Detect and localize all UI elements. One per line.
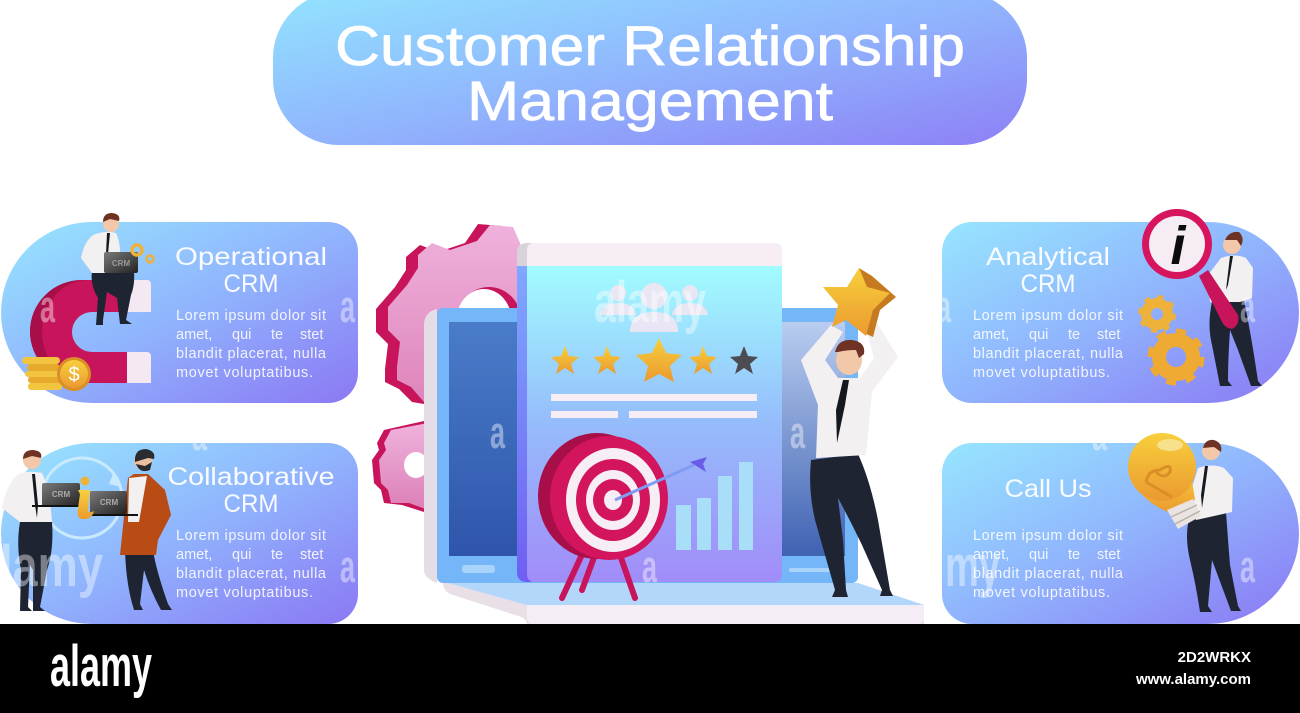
text placeholder lines [551,394,757,418]
analytical CRM text: CRM [1020,270,1076,298]
icon: customer silhouettes [600,283,708,332]
icon: small pink gear [372,421,428,512]
icon: target with arrow [538,433,707,598]
operational CRM text: movet voluptatibus. [176,365,313,381]
collaborative CRM text: te [271,547,283,563]
operational CRM text [175,243,327,381]
panel: operational CRM background [1,222,358,403]
panel: analytical CRM background [942,222,1299,403]
analytical CRM text: qui [1029,327,1048,343]
title text: Management [467,69,833,132]
title text: Customer Relationship [335,14,965,77]
call us text: Lorem ipsum dolor sit [973,528,1123,544]
operational CRM text: blandit placerat, nulla [176,346,327,362]
watermark letters: a [40,281,55,332]
panel: collaborative CRM background [1,443,358,624]
watermark letters: a [642,541,657,592]
collaborative CRM text [168,463,334,601]
call us text: blandit placerat, nulla [973,566,1124,582]
collaborative CRM text: Collaborative [168,463,334,491]
analytical CRM text: amet, [973,327,1009,343]
watermark letters: a [1240,541,1255,592]
call us text: stet [1097,547,1120,563]
collaborative CRM text: Lorem ipsum dolor sit [176,528,326,544]
call us text: qui [1029,547,1048,563]
operational CRM text: qui [232,327,251,343]
collaborative CRM text: CRM [224,490,278,518]
footer bar [0,624,1300,713]
illustration: review document [517,243,782,582]
watermark letters: a [936,281,951,332]
icon: magnifier, gears and man: i [1170,216,1186,276]
icon: light bulb and man [1128,433,1241,612]
panel: call us background [942,443,1299,624]
icon: magnet with coins and seated man: CRM [112,259,130,268]
collaborative CRM text: qui [232,547,251,563]
rating stars [551,338,758,382]
analytical CRM text: stet [1097,327,1120,343]
analytical CRM text: Lorem ipsum dolor sit [973,308,1123,324]
operational CRM text: CRM [224,270,278,298]
call us text: movet voluptatibus. [973,585,1110,601]
operational CRM text: amet, [176,327,212,343]
watermark letters: a [340,541,355,592]
watermark letters [0,270,1255,599]
watermark letters: a [1092,409,1107,460]
watermark letters: my [945,534,1000,599]
watermark letters: alamy [594,270,706,335]
alamy logo: alamy [50,634,152,699]
watermark letters: lamy [0,534,103,599]
analytical CRM text: movet voluptatibus. [973,365,1110,381]
analytical CRM text [973,243,1124,381]
collaborative CRM text: blandit placerat, nulla [176,566,327,582]
collaborative CRM text: amet, [176,547,212,563]
collaborative CRM text: stet [300,547,323,563]
watermark letters: a [490,407,505,458]
operational CRM text: Operational [175,243,327,271]
analytical CRM text: te [1068,327,1080,343]
icon: two men exchanging information: CRM [52,490,70,499]
call us text: te [1068,547,1080,563]
image ID: 2D2WRKX [1178,649,1251,666]
call us text: amet, [973,547,1009,563]
icon: large pink gear [376,224,521,420]
illustration: laptop [424,308,924,624]
figure: man holding gold star [801,268,898,597]
icon: magnet with coins and seated man [22,213,154,391]
collaborative CRM text: movet voluptatibus. [176,585,313,601]
bar chart [676,462,753,550]
watermark letters: a [340,281,355,332]
analytical CRM text: Analytical [986,243,1110,271]
analytical CRM text: blandit placerat, nulla [973,346,1124,362]
website: www.alamy.com [1135,671,1251,688]
icon: two men exchanging information [2,449,172,611]
icon: magnifier, gears and man [1140,209,1262,386]
icon: two men exchanging information: CRM [100,498,118,507]
icon: magnet with coins and seated man: $ [68,364,80,386]
operational CRM text: stet [300,327,323,343]
operational CRM text: Lorem ipsum dolor sit [176,308,326,324]
watermark letters: a [790,407,805,458]
call us text [973,475,1124,601]
watermark letters: a [1240,281,1255,332]
title banner [273,0,1027,145]
watermark letters: a [192,409,207,460]
call us text: Call Us [1004,475,1092,503]
operational CRM text: te [271,327,283,343]
